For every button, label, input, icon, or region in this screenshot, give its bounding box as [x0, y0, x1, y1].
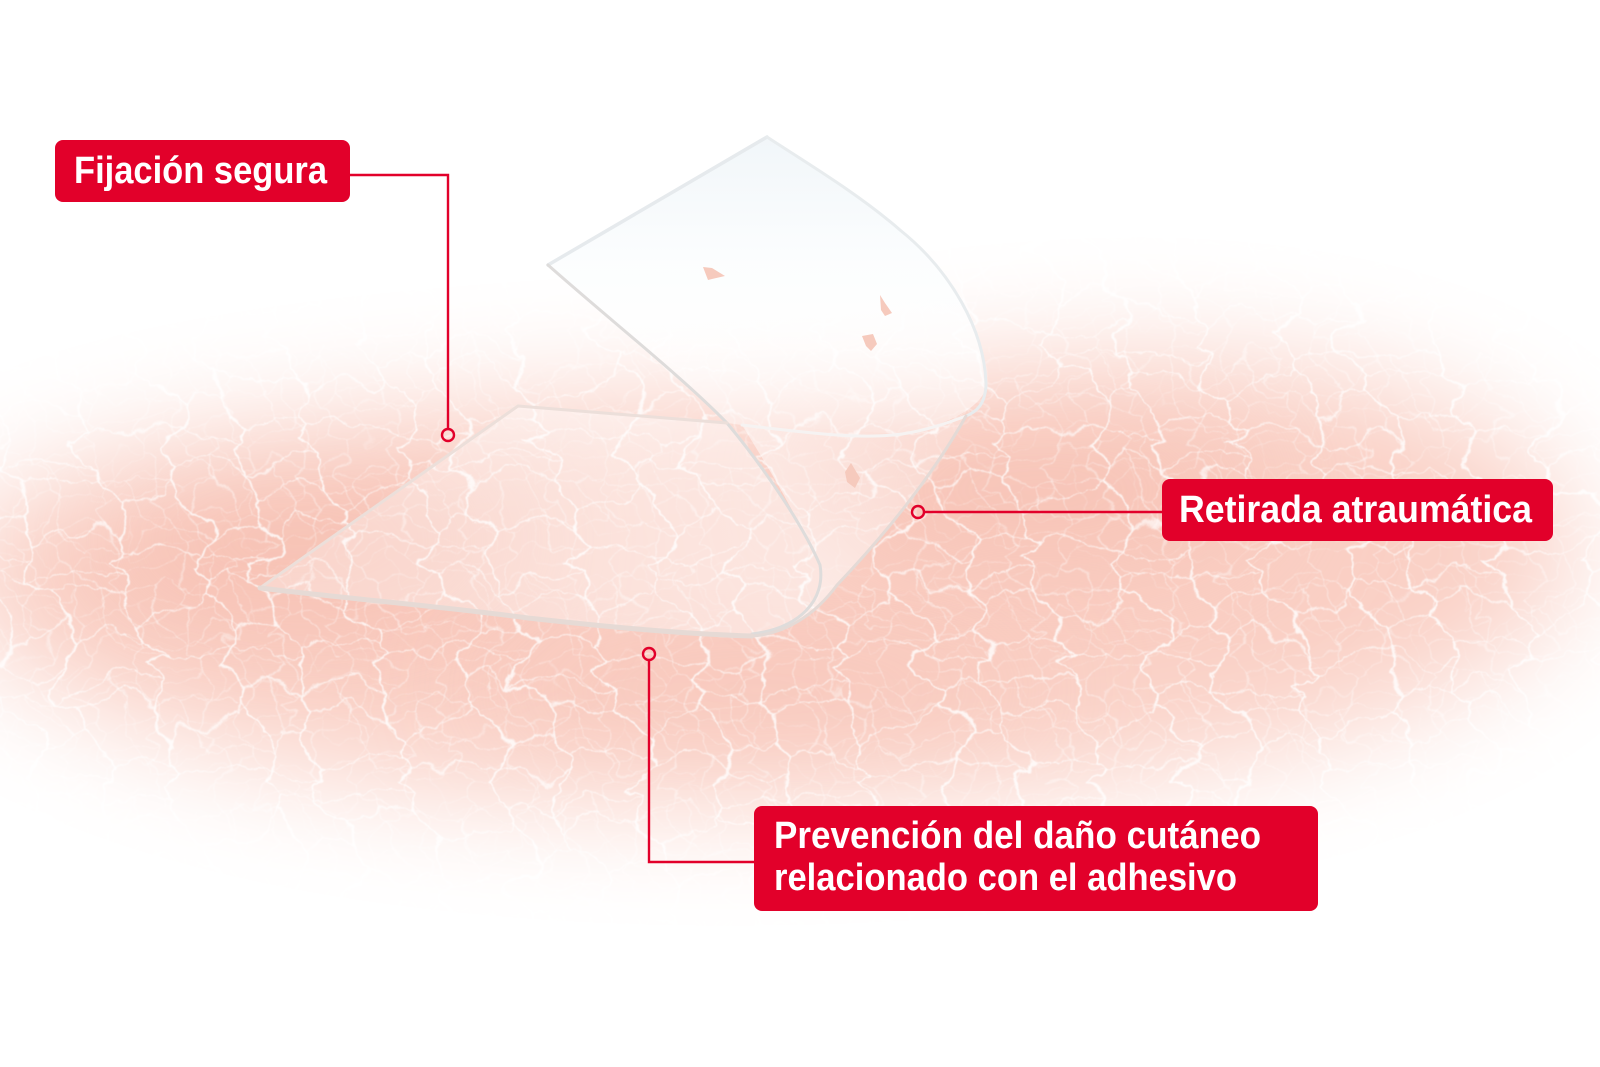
label box: [1162, 479, 1553, 541]
callout: Fijación segura: [55, 140, 454, 441]
callout: Prevención del daño cutáneo: [643, 648, 1318, 911]
marker: [912, 506, 924, 518]
skin flakes on dressing: [703, 267, 892, 488]
skin texture band: [0, 300, 1600, 862]
flat part of dressing: [260, 406, 819, 634]
leader line: [649, 661, 754, 862]
marker: [643, 648, 655, 660]
label text: Fijación segura: [74, 150, 328, 192]
leader line: [350, 175, 448, 429]
raised sheet of dressing: [548, 137, 986, 434]
label box: [754, 806, 1318, 911]
marker: [442, 429, 454, 441]
leader line: [924, 511, 1162, 513]
label text: Prevención del daño cutáneo: [774, 815, 1261, 857]
fold strip of dressing: [742, 416, 966, 634]
callout: Retirada atraumática: [912, 479, 1553, 541]
transparent dressing: [260, 137, 986, 636]
infographic canvas: [0, 135, 1600, 911]
label text: relacionado con el adhesivo: [774, 857, 1237, 899]
label box: [55, 140, 350, 202]
dressing edges: [260, 137, 986, 636]
label text: Retirada atraumática: [1179, 489, 1533, 531]
